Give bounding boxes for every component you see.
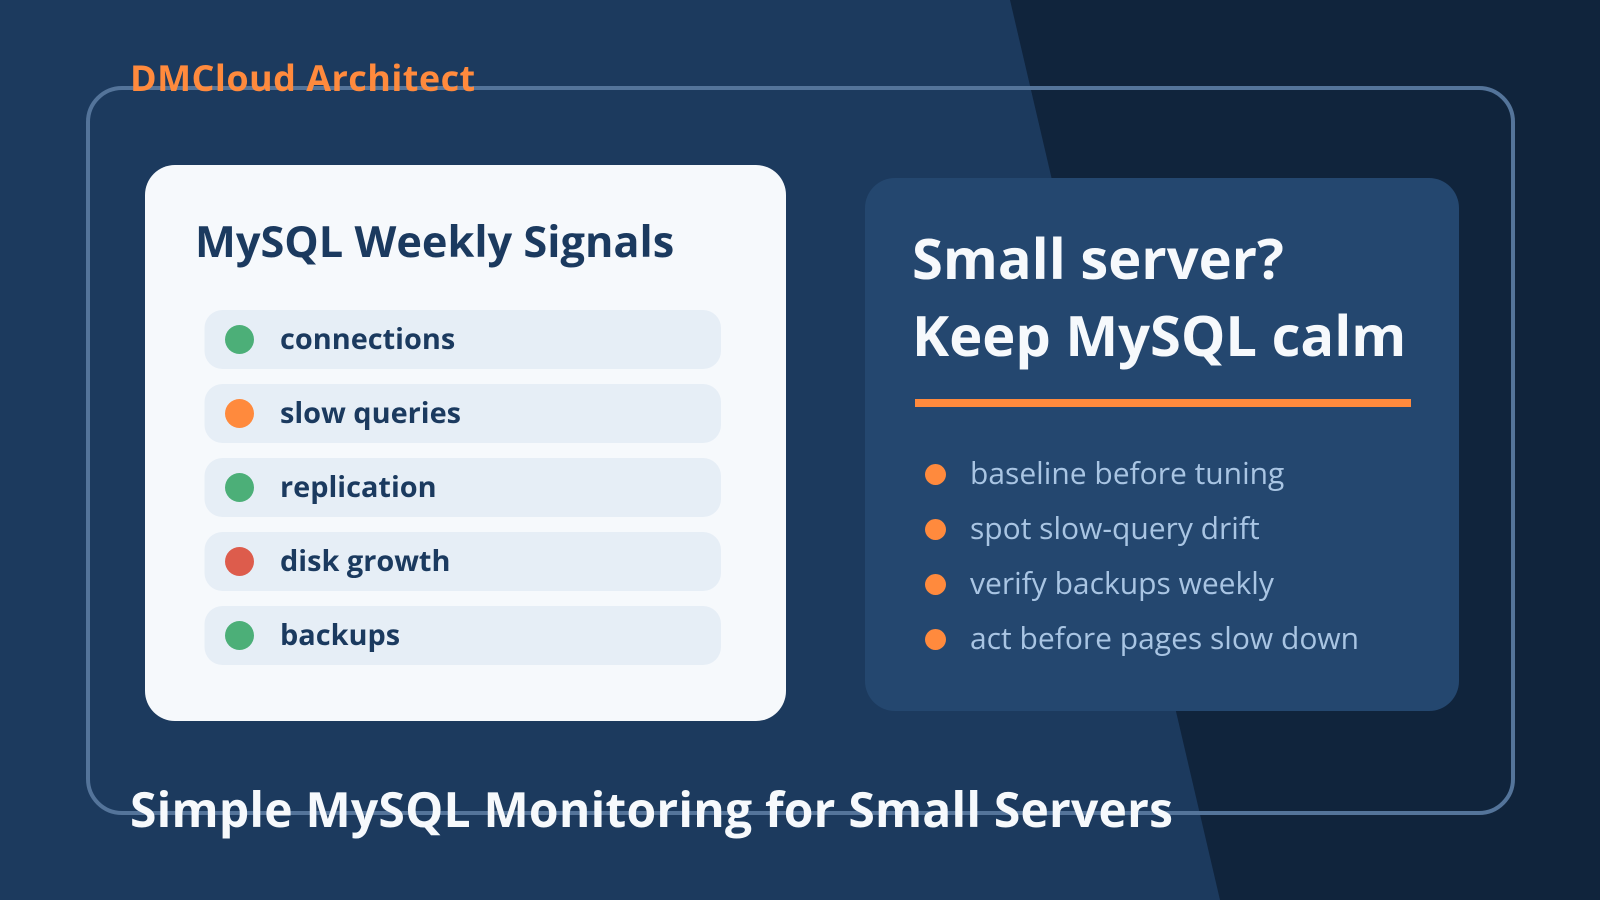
dark message card (865, 178, 1459, 711)
outer frame (88, 88, 1513, 813)
panel heading: MySQL Weekly Signals (195, 211, 674, 270)
signal row: connections (204, 310, 721, 369)
row label: connections: connections (280, 319, 455, 358)
orange divider (915, 399, 1411, 407)
brand label: DMCloud Architect (130, 53, 476, 102)
bullet text: baseline before tuning: baseline before tuning (970, 452, 1284, 493)
signal row: disk growth (204, 532, 721, 591)
signal row: backups (204, 606, 721, 665)
bullet text: verify backups weekly: verify backups weekly (970, 562, 1274, 603)
title: Simple MySQL Monitoring for Small Servers (130, 777, 1173, 842)
signal row: slow queries (204, 384, 721, 443)
bullet dots (925, 464, 946, 650)
heading line two: Keep MySQL calm (912, 297, 1406, 373)
bullet text: spot slow-query drift: spot slow-query drift (970, 507, 1260, 548)
row label: replication: replication (280, 467, 437, 506)
row label: slow queries: slow queries (280, 393, 461, 432)
signal row: replication (204, 458, 721, 517)
white signals card (145, 165, 786, 721)
bullet text: act before pages slow down: act before pages slow down (970, 617, 1359, 658)
row label: backups: backups (280, 615, 400, 654)
background dark diagonal panel (1010, 0, 1600, 900)
heading line one: Small server? (912, 220, 1284, 296)
row label: disk growth: disk growth (280, 541, 450, 580)
